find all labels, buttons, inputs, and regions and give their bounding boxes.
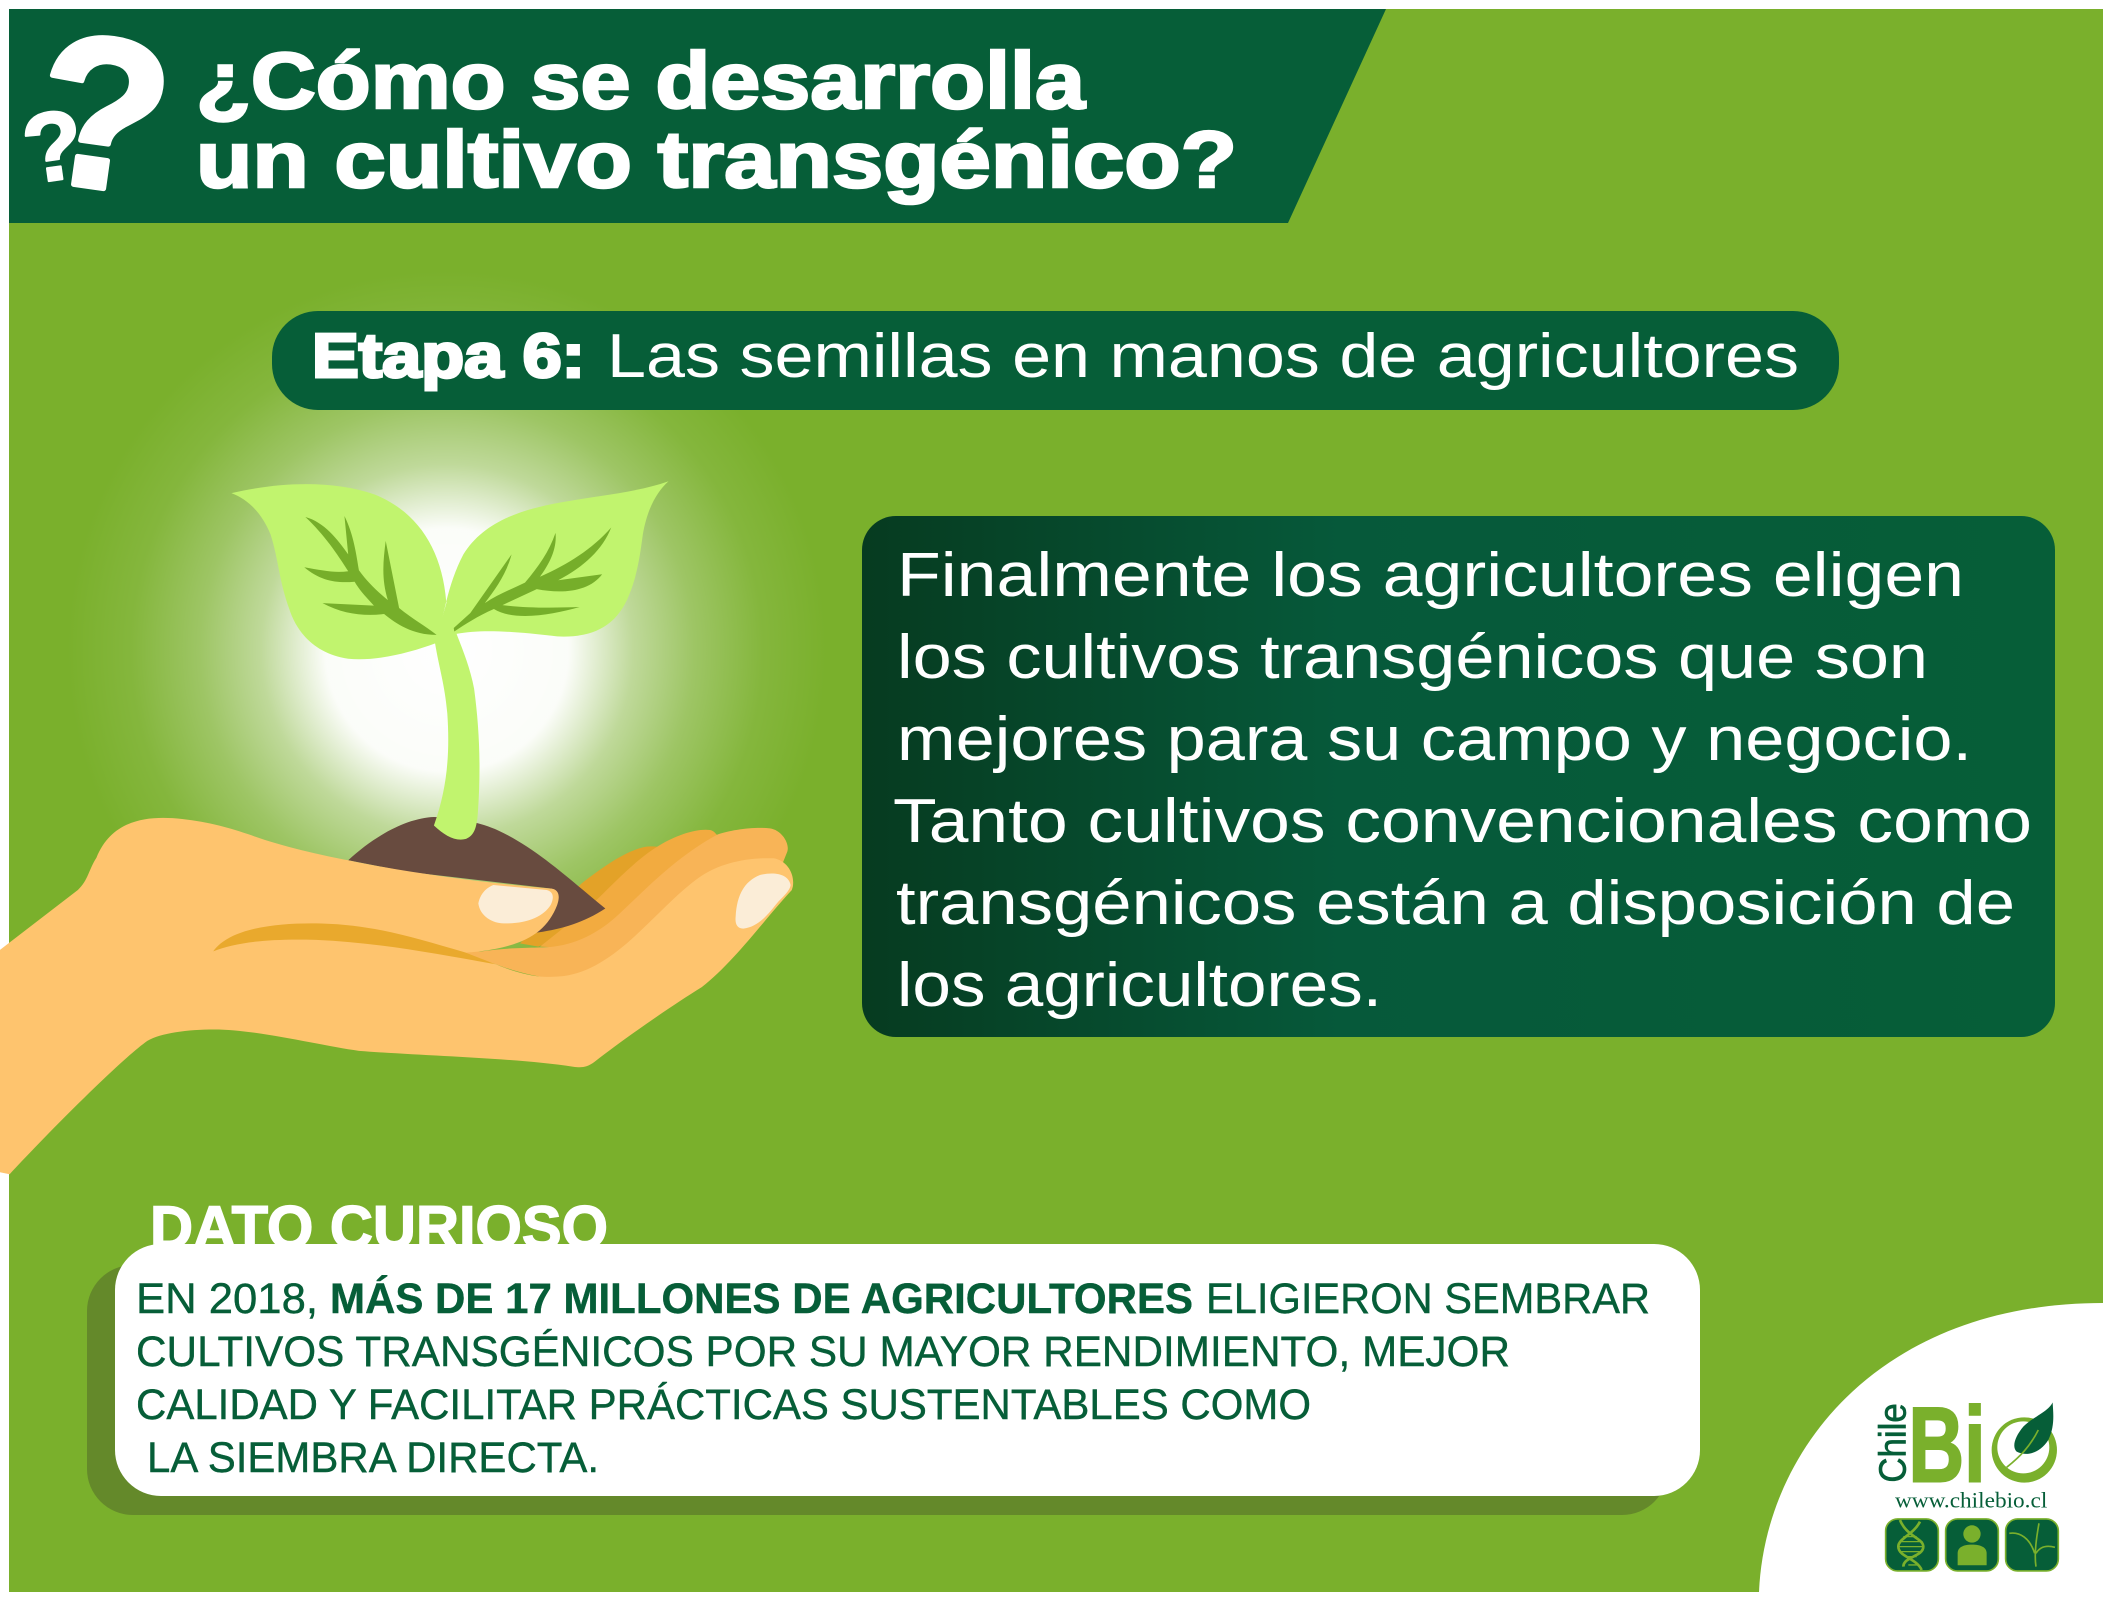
explanation text: Finalmente los agricultores eligen <box>897 541 1964 610</box>
fun fact text: CALIDAD Y FACILITAR PRÁCTICAS SUSTENTABLES COMO <box>136 1381 1311 1429</box>
fun fact text: CULTIVOS TRANSGÉNICOS POR SU MAYOR RENDIMIENTO, MEJOR <box>136 1328 1510 1376</box>
title heading: un cultivo transgénico? <box>196 115 1237 204</box>
stage title: Las semillas en manos de agricultores <box>607 322 1799 391</box>
icon: DNA <box>1886 1519 1938 1571</box>
back fingers <box>453 828 788 978</box>
logo wordmark: Bi <box>1908 1385 1986 1505</box>
explanation text <box>893 541 2032 1020</box>
fun fact heading: DATO CURIOSO <box>150 1194 608 1261</box>
explanation text: los cultivos transgénicos que son <box>897 623 1928 692</box>
palm and thumb <box>0 818 793 1174</box>
fun fact text <box>136 1275 1650 1482</box>
icon: person <box>1946 1519 1998 1571</box>
fun fact text: LA SIEMBRA DIRECTA. <box>147 1434 599 1482</box>
website: www.chilebio.cl <box>1895 1487 2047 1512</box>
logo corner <box>1759 1303 2103 1592</box>
title banner <box>9 0 1386 242</box>
palm crease <box>213 923 496 964</box>
left leaf <box>231 484 446 659</box>
seedling stem <box>434 602 479 840</box>
stage pill <box>272 311 1839 410</box>
icon: question marks: ? <box>16 88 90 205</box>
finger nail <box>736 873 791 929</box>
logo wordmark: Chile <box>1873 1403 1915 1483</box>
stage label bold: Etapa 6: <box>312 322 585 391</box>
explanation text: los agricultores. <box>897 951 1382 1020</box>
explanation panel <box>862 516 2055 1037</box>
fun fact text: ELIGIERON SEMBRAR <box>1206 1275 1650 1323</box>
title heading: ¿Cómo se desarrolla <box>196 36 1086 125</box>
soil <box>348 817 605 933</box>
icon: plant <box>2006 1519 2058 1571</box>
explanation text: Tanto cultivos convencionales como <box>893 787 2032 856</box>
explanation text: mejores para su campo y negocio. <box>897 705 1972 774</box>
fun fact card <box>115 1244 1700 1496</box>
logo: ChileBio <box>1873 1385 2058 1571</box>
logo leaf O <box>1992 1402 2057 1483</box>
logo wordmark <box>1873 1385 1986 1505</box>
thumb nail <box>478 885 553 923</box>
illustration: hand holding seedling <box>0 481 793 1174</box>
glow behind plant <box>60 270 840 1050</box>
title heading <box>196 36 1237 204</box>
fun fact text: MÁS DE 17 MILLONES DE AGRICULTORES <box>330 1275 1193 1323</box>
explanation text: transgénicos están a disposición de <box>896 869 2015 938</box>
fun fact card shadow <box>87 1265 1668 1515</box>
right leaf <box>446 481 669 637</box>
fun fact text: EN 2018, <box>136 1275 318 1323</box>
